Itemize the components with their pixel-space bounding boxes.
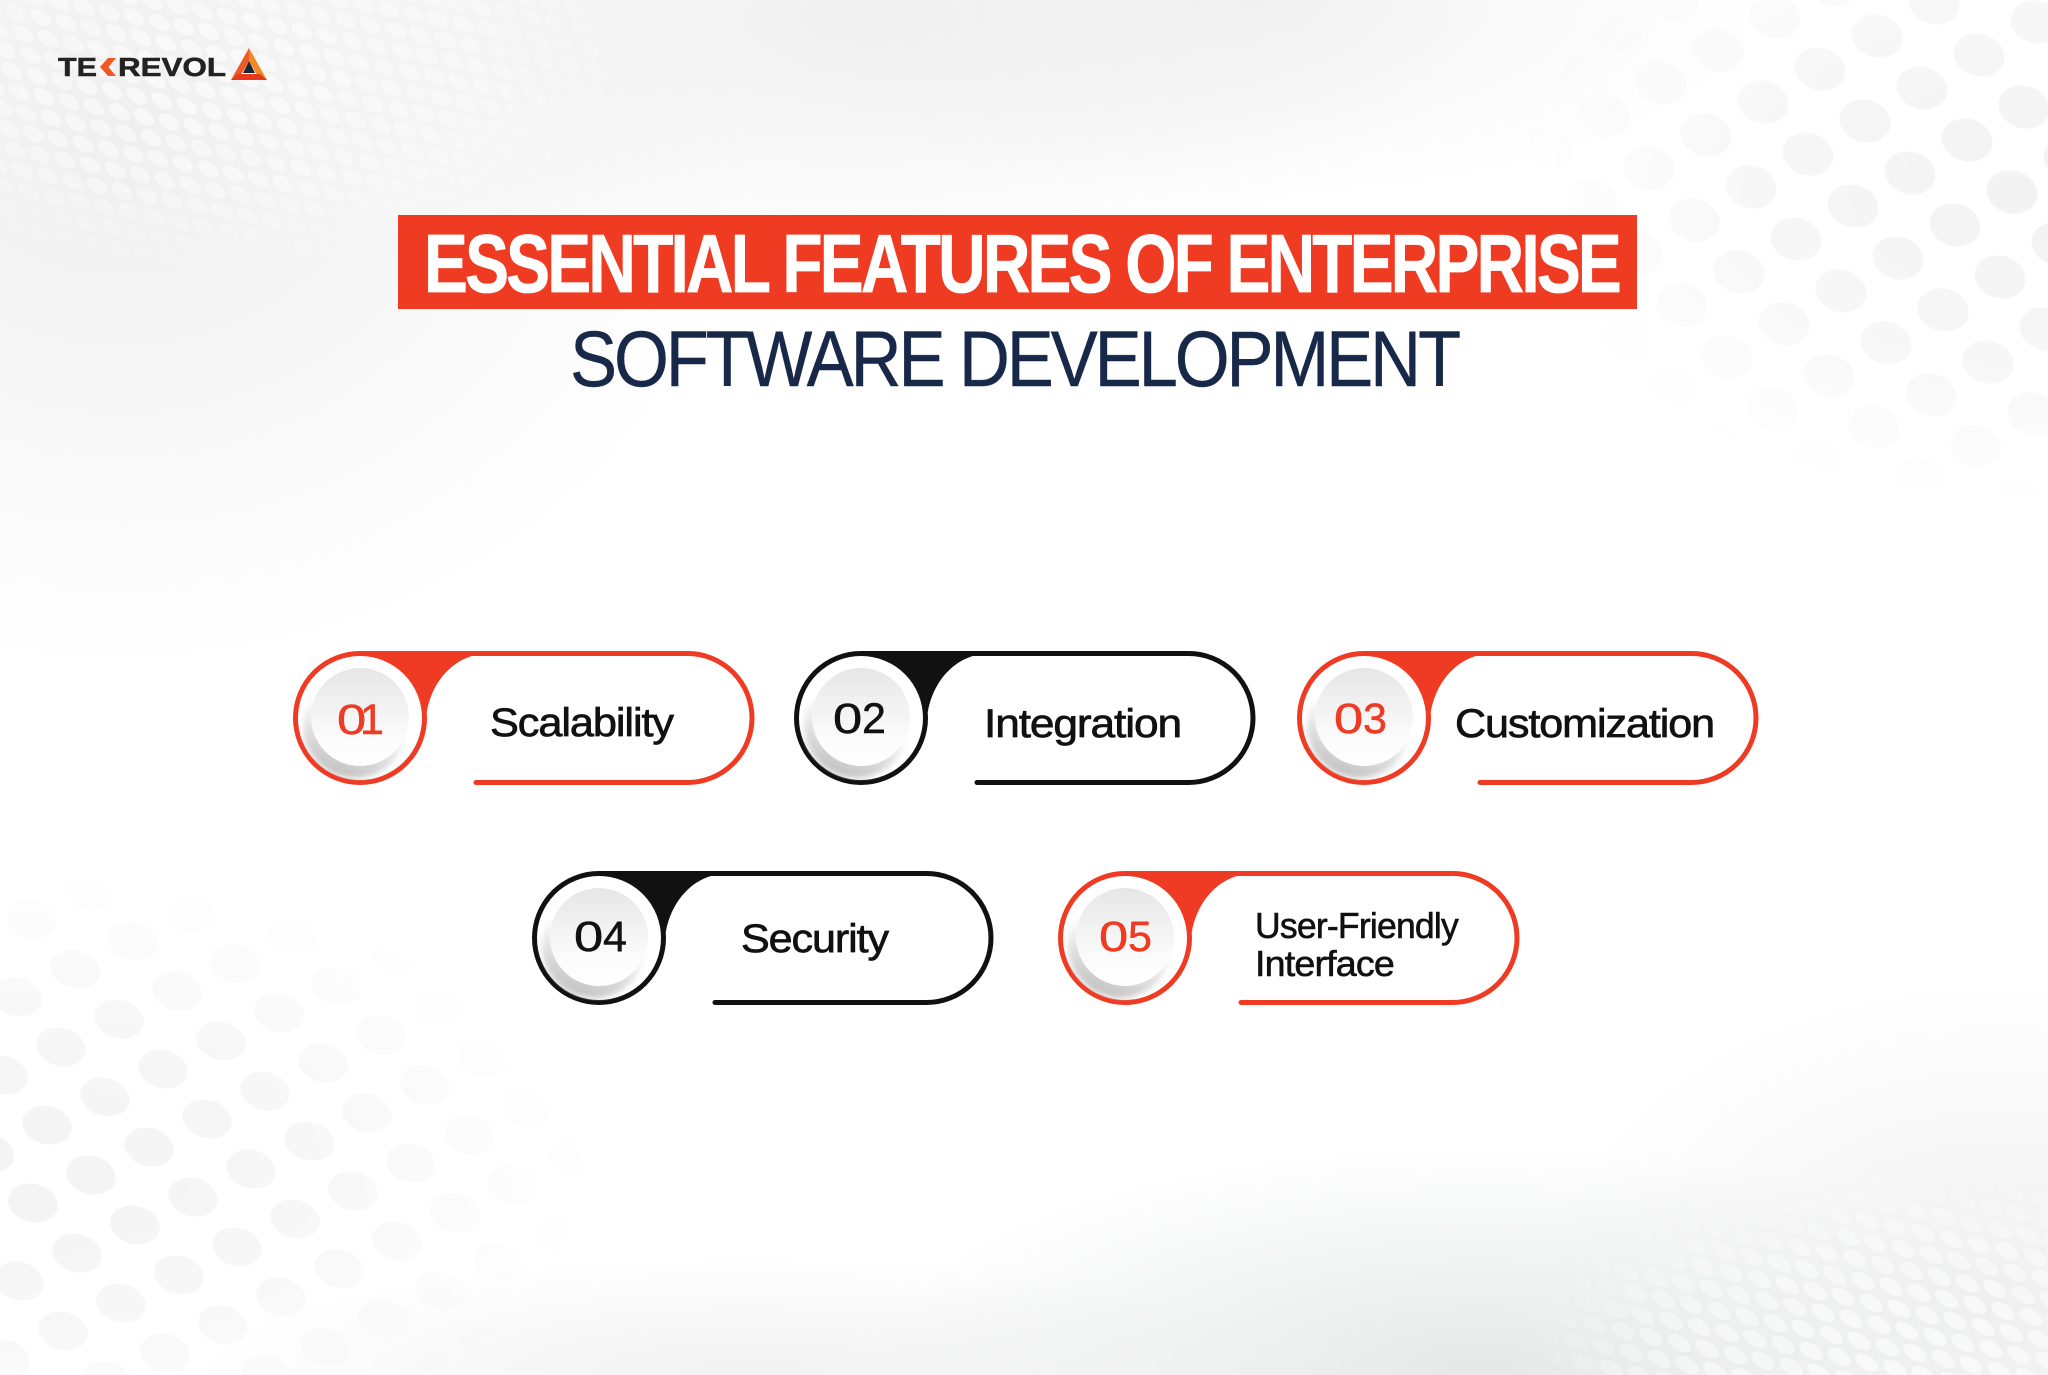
- label: Scalability: [490, 701, 674, 745]
- label: [1255, 905, 1459, 984]
- title highlight bar: [398, 215, 1637, 309]
- icon: logo triangle: [231, 48, 267, 80]
- label: Customization: [1455, 702, 1714, 746]
- feature card 01: Scalability: [296, 654, 752, 782]
- title line 2: SOFTWARE DEVELOPMENT: [570, 314, 1460, 403]
- label: Interface: [1255, 943, 1394, 984]
- number: [574, 915, 640, 959]
- logo wordmark: TE: [58, 52, 97, 82]
- number: [833, 697, 899, 741]
- logo: Tekrevol: [58, 48, 267, 82]
- logo wordmark: REVOL: [118, 52, 226, 82]
- feature card 02: Integration: [796, 654, 1253, 782]
- label: Integration: [984, 702, 1181, 746]
- number: [337, 698, 397, 742]
- logo wordmark: [58, 52, 226, 82]
- title: [398, 215, 1637, 403]
- label: Security: [741, 917, 889, 961]
- title line 1: ESSENTIAL FEATURES OF ENTERPRISE: [424, 217, 1620, 310]
- label: User-Friendly: [1255, 905, 1459, 946]
- number: [1334, 697, 1400, 741]
- feature card 05: User-Friendly Interface: [1060, 874, 1517, 1002]
- number: [1099, 915, 1165, 959]
- feature card 03: Customization: [1300, 654, 1756, 782]
- feature card 04: Security: [534, 874, 991, 1002]
